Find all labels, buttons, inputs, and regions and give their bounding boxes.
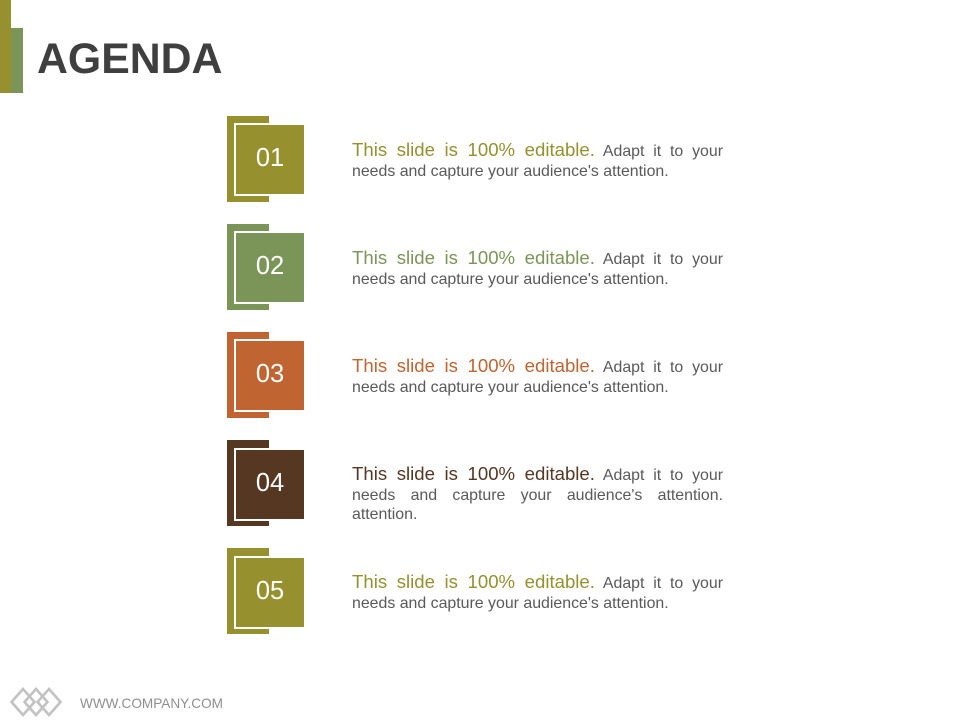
item 01 text: This slide is 100% editable. Adapt it to your — [352, 139, 723, 160]
item 05 text: This slide is 100% editable. Adapt it to your — [352, 571, 723, 592]
header accent bars — [0, 0, 23, 93]
item 04 text — [352, 463, 723, 523]
item 02 badge: 02 — [256, 252, 284, 280]
icon: footer diamonds logo — [10, 687, 62, 717]
item 04 badge — [227, 440, 304, 526]
item 01 text — [352, 139, 723, 180]
item 02 text: This slide is 100% editable. Adapt it to your — [352, 247, 723, 268]
item 01 text: needs and capture your audience's attention. — [352, 162, 669, 180]
footer website text: WWW.COMPANY.COM — [80, 696, 223, 711]
item 05 badge: 05 — [256, 577, 284, 605]
item 05 badge — [227, 548, 304, 634]
item 03 text: needs and capture your audience's attention. — [352, 378, 669, 396]
item 05 text — [352, 571, 723, 612]
item 03 text — [352, 355, 723, 396]
item 03 badge — [227, 332, 304, 418]
item 02 text: needs and capture your audience's attention. — [352, 270, 669, 288]
item 02 text — [352, 247, 723, 288]
item 05 text: needs and capture your audience's attention. — [352, 594, 669, 612]
item 01 badge: 01 — [256, 144, 284, 172]
item 04 text: attention. — [352, 506, 417, 523]
item 01 badge — [227, 116, 304, 202]
item 04 text: This slide is 100% editable. Adapt it to your — [352, 463, 723, 484]
item 02 badge — [227, 224, 304, 310]
item 04 badge: 04 — [256, 469, 284, 497]
item 03 badge: 03 — [256, 360, 284, 388]
item 04 text: needs and capture your audience's attention. — [352, 486, 723, 504]
title: AGENDA — [37, 35, 222, 83]
item 03 text: This slide is 100% editable. Adapt it to your — [352, 355, 723, 376]
